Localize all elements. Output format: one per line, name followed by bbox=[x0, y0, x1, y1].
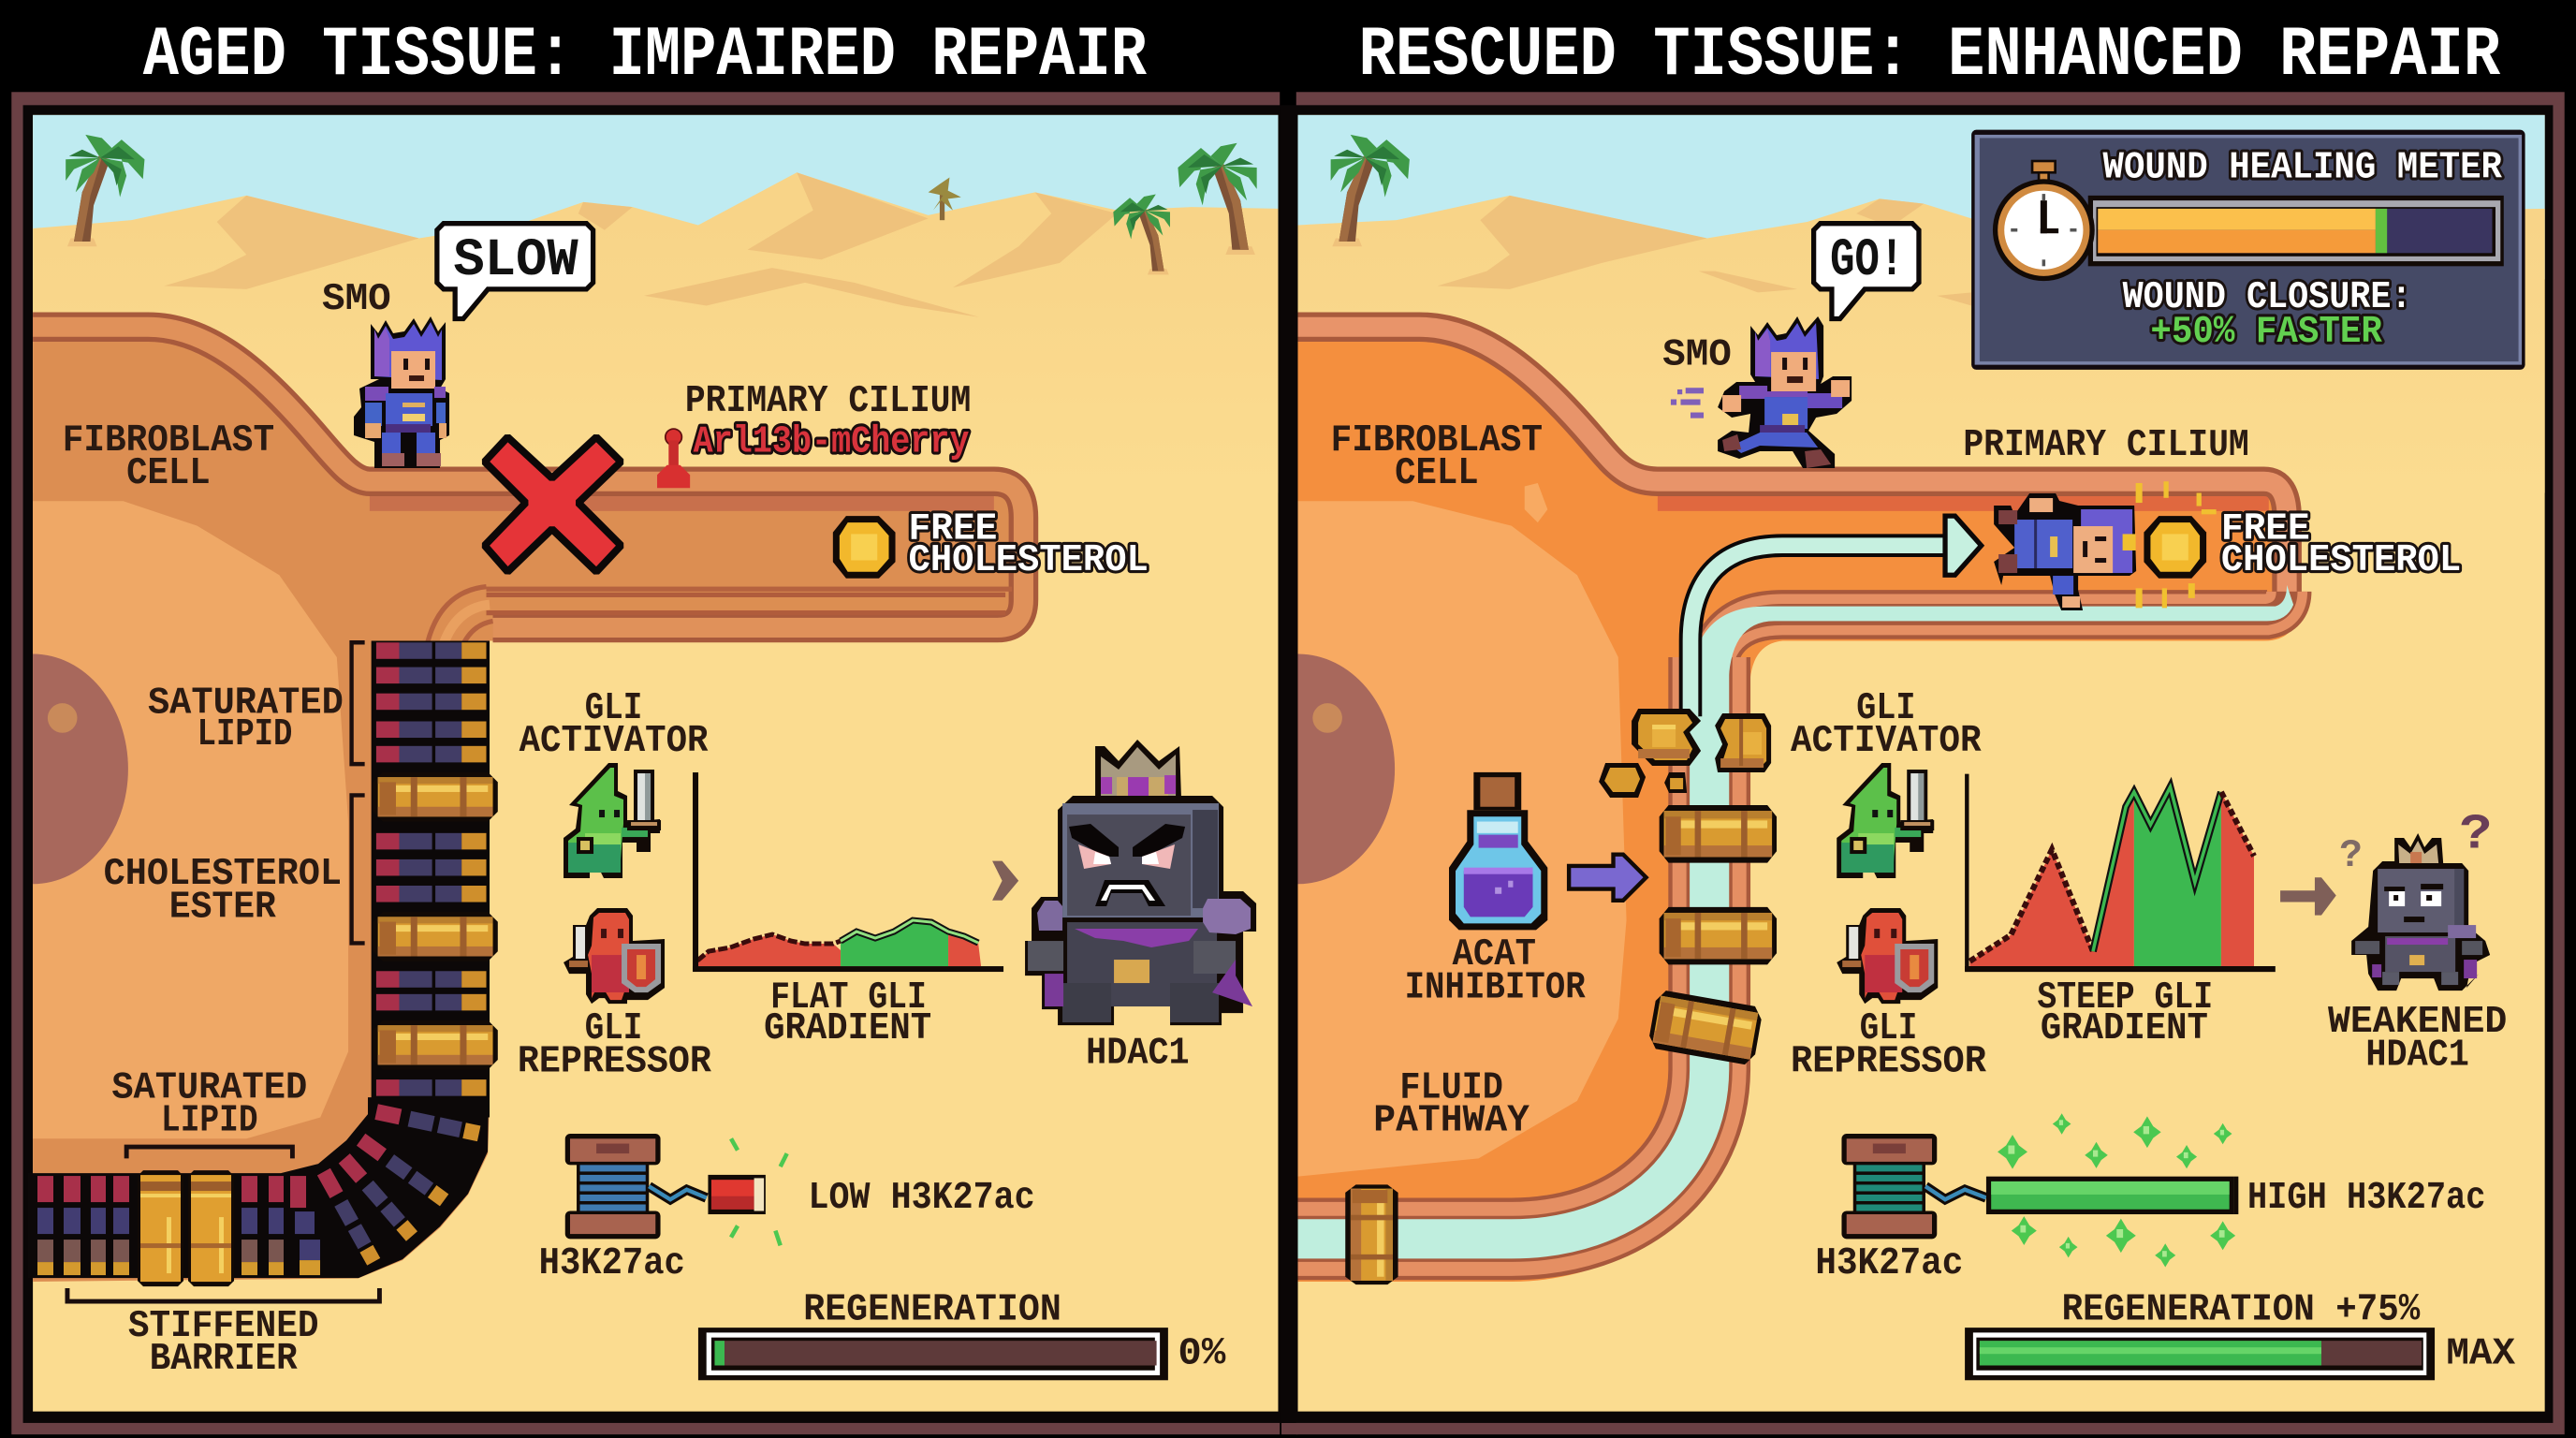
lipid raft column bbox=[372, 640, 498, 1117]
label: low h3k27ac: LOW H3K27ac bbox=[809, 1177, 1035, 1220]
label: h3k27ac: H3K27ac bbox=[539, 1242, 685, 1285]
icon: red gli repressor soldier bbox=[1837, 908, 1938, 1004]
icon: acat inhibitor potion bbox=[1449, 772, 1547, 930]
bracket: saturated lipid lower bbox=[126, 1147, 292, 1158]
label: free cholesterol: CHOLESTEROL bbox=[909, 539, 1149, 582]
smo character: running bbox=[1718, 316, 1852, 468]
icon: h3k27ac spool high bbox=[1841, 1134, 1986, 1239]
label: steep gli gradient: GRADIENT bbox=[2041, 1007, 2208, 1050]
label: fluid pathway: PATHWAY bbox=[1373, 1100, 1530, 1143]
label: free cholesterol bbox=[2221, 508, 2461, 582]
label: gli repressor bbox=[1791, 1007, 1987, 1083]
label: gli activator bbox=[1791, 687, 1982, 763]
icon: question marks: ? bbox=[2339, 833, 2363, 878]
label: regeneration: REGENERATION bbox=[803, 1288, 1061, 1331]
nucleus bbox=[1298, 654, 1395, 884]
bar: high acetylation bbox=[1986, 1177, 2238, 1214]
label: weakened hdac1: HDAC1 bbox=[2365, 1034, 2469, 1077]
character: smo pushing in cilium bbox=[1994, 493, 2136, 610]
label: cholesterol ester: CHOLESTEROL bbox=[104, 853, 342, 896]
label: free cholesterol bbox=[909, 508, 1149, 582]
label: saturated lipid upper: SATURATED bbox=[148, 682, 344, 726]
label: fluid pathway: FLUID bbox=[1399, 1066, 1503, 1109]
label: gli activator: GLI bbox=[585, 687, 642, 730]
label: max: MAX bbox=[2446, 1333, 2516, 1376]
bracket: stiffened barrier bbox=[67, 1288, 379, 1301]
label: steep gli gradient bbox=[2037, 976, 2213, 1050]
fibroblast cell body bbox=[33, 314, 1036, 1282]
palm tree right bbox=[1178, 143, 1257, 255]
bar: regeneration max bbox=[1965, 1328, 2435, 1380]
palm tree distant bbox=[929, 178, 961, 220]
label: gli activator: ACTIVATOR bbox=[520, 720, 709, 763]
arrow: inhibitor to membrane bbox=[1569, 855, 1647, 901]
fluid pathway channel bbox=[1298, 585, 2293, 1239]
label: high h3k27ac: HIGH H3K27ac bbox=[2247, 1177, 2485, 1220]
label: acat inhibitor bbox=[1405, 933, 1586, 1009]
motion lines bbox=[1671, 388, 1704, 418]
label: flat gli gradient bbox=[764, 976, 931, 1050]
label: smo: SMO bbox=[1662, 334, 1732, 377]
speech bubble: slow: SLOW bbox=[453, 230, 578, 290]
arrow: fluid flow to cilium bbox=[1690, 516, 1982, 716]
label: fluid pathway bbox=[1373, 1066, 1530, 1143]
icon: free cholesterol coin with sparks bbox=[2123, 481, 2217, 608]
label: fibroblast cell: FIBROBLAST bbox=[63, 419, 274, 462]
sparks: high acetylation bbox=[1998, 1113, 2235, 1268]
desert dunes bbox=[1438, 196, 1971, 305]
label: flat gli gradient: FLAT GLI bbox=[770, 976, 927, 1020]
label: free cholesterol: CHOLESTEROL bbox=[2221, 539, 2461, 582]
chart: flat gli gradient bbox=[693, 772, 1003, 972]
icon: green gli activator soldier bbox=[1837, 763, 1934, 878]
label: fibroblast cell bbox=[63, 419, 274, 495]
character: angry hdac1 bbox=[1025, 740, 1256, 1025]
icon: arl13b marker pin bbox=[657, 429, 690, 488]
label: hdac1: HDAC1 bbox=[1086, 1033, 1190, 1076]
bracket: cholesterol ester bbox=[352, 795, 365, 943]
bracket: saturated lipid bbox=[352, 642, 365, 764]
character: weakened hdac1 bbox=[2351, 833, 2490, 990]
icon: stopwatch bbox=[1993, 161, 2095, 281]
palm tree bbox=[1331, 135, 1410, 246]
label: cholesterol ester: ESTER bbox=[169, 886, 277, 929]
fibroblast cell body bbox=[1298, 314, 2300, 1282]
palm tree small bbox=[1113, 194, 1170, 274]
panel: wound healing meter bbox=[1971, 130, 2525, 370]
arrow: chevron to hdac1 bbox=[992, 861, 1018, 901]
label: weakened hdac1: WEAKENED bbox=[2328, 1001, 2507, 1044]
label: stiffened barrier bbox=[128, 1305, 318, 1381]
label: regeneration +75%: REGENERATION +75% bbox=[2062, 1288, 2421, 1331]
label: steep gli gradient: STEEP GLI bbox=[2037, 976, 2213, 1020]
label: gli repressor: REPRESSOR bbox=[1791, 1040, 1987, 1083]
label: saturated lipid upper bbox=[148, 682, 344, 756]
lipid barrels: intact and broken bbox=[1345, 709, 1777, 1284]
label: acat inhibitor: ACAT bbox=[1453, 933, 1536, 976]
label: flat gli gradient: GRADIENT bbox=[764, 1007, 931, 1050]
label: Arl13b-mCherry: Arl13b-mCherry bbox=[694, 421, 970, 464]
desert dunes bbox=[165, 172, 1117, 317]
label: fibroblast cell: CELL bbox=[1395, 452, 1479, 495]
label: gli repressor bbox=[518, 1007, 712, 1083]
label: acat inhibitor: INHIBITOR bbox=[1405, 966, 1586, 1009]
arrow: to weakened hdac1 bbox=[2280, 877, 2336, 916]
label: 0%: 0% bbox=[1178, 1333, 1226, 1376]
label: fibroblast cell bbox=[1331, 419, 1543, 495]
title: aged tissue: AGED TISSUE: IMPAIRED REPAIR bbox=[143, 15, 1148, 95]
label: free cholesterol: FREE bbox=[909, 508, 997, 551]
label: wound healing meter: WOUND HEALING METER bbox=[2103, 147, 2503, 190]
label: gli repressor: GLI bbox=[1860, 1007, 1917, 1050]
label: saturated lipid lower: LIPID bbox=[161, 1100, 258, 1143]
label: fibroblast cell: FIBROBLAST bbox=[1331, 419, 1543, 462]
meter bar bbox=[2088, 196, 2504, 266]
label: saturated lipid lower bbox=[111, 1066, 307, 1143]
label: h3k27ac: H3K27ac bbox=[1815, 1242, 1963, 1285]
label: primary cilium: PRIMARY CILIUM bbox=[1963, 424, 2249, 467]
label: wound closure: WOUND CLOSURE: bbox=[2123, 276, 2411, 319]
label: gli repressor: GLI bbox=[585, 1007, 642, 1050]
label: gli activator: GLI bbox=[1856, 687, 1915, 730]
label: gli activator: ACTIVATOR bbox=[1791, 720, 1982, 763]
speech bubble: go bbox=[1814, 224, 1919, 318]
nucleus bbox=[33, 654, 128, 884]
label: weakened hdac1 bbox=[2328, 1001, 2507, 1077]
icon: free cholesterol coin bbox=[833, 516, 896, 579]
label: stiffened barrier: STIFFENED bbox=[128, 1305, 318, 1348]
curved lipid barrier bottom bbox=[28, 1097, 489, 1286]
icon: green gli activator soldier bbox=[564, 763, 661, 878]
label: gli repressor: REPRESSOR bbox=[518, 1040, 712, 1083]
panel: rescued tissue bbox=[1281, 92, 2565, 1434]
palm tree left bbox=[66, 135, 144, 246]
label: saturated lipid upper: LIPID bbox=[198, 713, 292, 756]
sparks: low acetylation bbox=[731, 1138, 787, 1245]
label: gli activator bbox=[520, 687, 709, 763]
chart: steep gli gradient bbox=[1965, 774, 2276, 972]
speech bubble: go: GO! bbox=[1830, 230, 1904, 290]
bar: regeneration 0% bbox=[698, 1328, 1168, 1380]
icon: question marks: ? bbox=[2459, 807, 2492, 863]
label: free cholesterol: FREE bbox=[2221, 508, 2310, 551]
label: fibroblast cell: CELL bbox=[126, 452, 211, 495]
label: primary cilium: PRIMARY CILIUM bbox=[685, 380, 971, 423]
label: cholesterol ester bbox=[104, 853, 342, 929]
smo character: slow bbox=[354, 316, 449, 468]
label: stiffened barrier: BARRIER bbox=[150, 1338, 298, 1381]
panel: aged tissue bbox=[11, 92, 1281, 1434]
label: saturated lipid lower: SATURATED bbox=[111, 1066, 307, 1109]
icon: h3k27ac spool low bbox=[565, 1134, 766, 1239]
label: +50% faster: +50% FASTER bbox=[2150, 311, 2383, 354]
icon: red gli repressor soldier bbox=[564, 908, 665, 1004]
icon: question marks bbox=[2339, 807, 2492, 878]
label: smo: SMO bbox=[322, 278, 391, 321]
speech bubble: slow bbox=[437, 224, 593, 318]
icon: red x block bbox=[485, 437, 621, 572]
